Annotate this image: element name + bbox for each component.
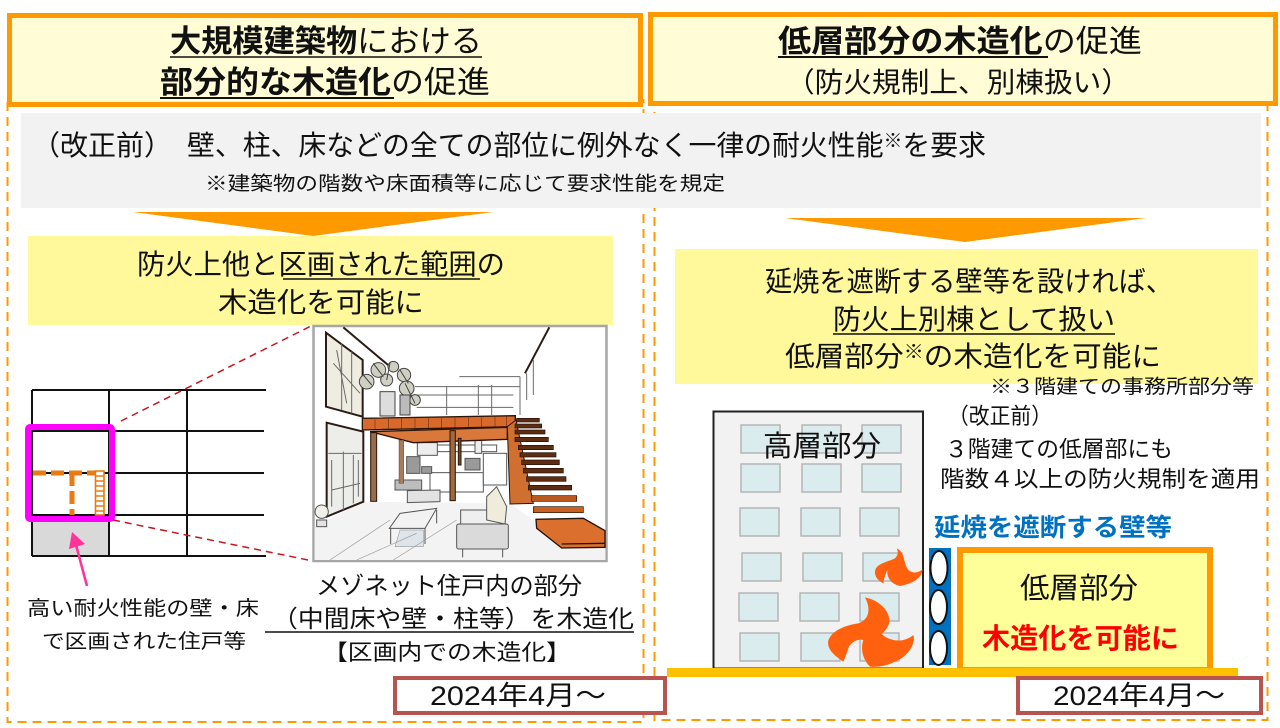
heading: left title <box>10 16 640 104</box>
text: before-revision note right: （改正前） <box>948 404 1052 429</box>
heading: right title: 低層部分の木造化 の促進 <box>778 24 1142 59</box>
sub-element: orange stair ladder <box>96 471 104 515</box>
callout: right yellow conclusion: 延焼を遮断する壁等を設ければ、 <box>765 266 1173 297</box>
panel: left dashed section <box>8 100 644 722</box>
sub-element: magenta highlighted unit <box>28 427 112 519</box>
sub-element: stair treads <box>515 418 583 513</box>
sub-element: sofa and table <box>315 487 508 560</box>
sub-element: windows <box>739 425 902 661</box>
arrow: left down arrow <box>133 212 493 236</box>
icon: small flame <box>875 548 923 586</box>
sub-element: orange mezzanine floor <box>362 416 515 443</box>
sub-element: plants on upper floor <box>359 361 420 416</box>
sub-element: kitchen <box>395 437 507 492</box>
text: maisonette caption: メゾネット住戸内の部分 <box>316 573 582 600</box>
text: before-revision tag: （改正前） <box>32 130 172 161</box>
chart: floor plan grid <box>28 390 266 556</box>
label: right date badge <box>1018 678 1261 713</box>
icon: large flame <box>828 597 914 667</box>
text: before-revision requirement: ※ <box>883 131 902 152</box>
text: partition label <box>27 597 259 653</box>
label: left date badge: 2024年4月～ <box>430 681 606 711</box>
callout: right yellow conclusion: の木造化を可能に <box>924 341 1161 372</box>
heading: right title: （防火規制上、別棟扱い） <box>786 67 1130 98</box>
sub-element: red dashed zoom lines <box>113 325 313 561</box>
text: partition label: で区画された住戸等 <box>42 630 246 653</box>
illustration: high-rise building <box>714 412 923 668</box>
heading: right title <box>650 14 1276 104</box>
sub-element: low-rise label: 低層部分 <box>1020 572 1138 605</box>
sub-element: orange dashed wood partitions <box>33 473 104 515</box>
callout: right yellow conclusion: ※ <box>904 342 924 363</box>
panel: right dashed section <box>654 100 1268 720</box>
panel: before-revision grey band <box>21 113 1261 208</box>
label: fire wall caption: 延焼を遮断する壁等 <box>934 514 1172 542</box>
callout: left yellow conclusion <box>28 236 613 325</box>
sub-element: columns <box>371 431 461 501</box>
sub-element: blue fire wall <box>929 548 951 665</box>
sub-element: red wooden label: 木造化を可能に <box>982 623 1179 654</box>
text: maisonette caption: 【区画内での木造化】 <box>323 640 571 665</box>
text: before-revision footnote: ※建築物の階数や床面積等に応じて要求性能を規定 <box>205 173 725 195</box>
sub-element: stair landing <box>536 518 605 548</box>
callout: right yellow conclusion: 低層部分 <box>785 341 897 372</box>
text: partition label: 高い耐火性能の壁・床 <box>27 597 259 620</box>
sub-element: walls and windows <box>326 327 549 517</box>
sub-element: high-rise label: 高層部分 <box>763 430 881 463</box>
sub-element: orange stair support wall <box>507 420 533 504</box>
text: before-revision requirement: を要求 <box>902 130 986 161</box>
illustration: low-rise wooden section <box>960 550 1210 670</box>
illustration: maisonette interior <box>314 326 606 561</box>
callout: right yellow conclusion <box>675 249 1258 384</box>
label: right date badge: 2024年4月～ <box>1053 681 1225 711</box>
text: maisonette caption: （中間床や壁・柱等）を木造化 <box>272 606 634 633</box>
text: before-revision note right: 階数４以上の防火規制を適用 <box>940 467 1260 492</box>
callout: right yellow conclusion: 防火上別棟として扱い <box>833 304 1115 335</box>
sub-element: ground line <box>667 668 1238 677</box>
arrow: right down arrow <box>785 218 1146 242</box>
sub-element: floor <box>315 502 605 560</box>
text: maisonette caption <box>265 573 634 665</box>
heading: left title: 部分的な木造化 の促進 <box>160 65 490 100</box>
callout: left yellow conclusion: 防火上他と区画された範囲の <box>137 249 505 280</box>
text: before-revision requirement: 壁、柱、床などの全ての部位に例外なく一律の耐火性能 <box>187 130 887 161</box>
label: left date badge <box>395 678 665 713</box>
arrow: pink arrow to partition <box>69 532 87 586</box>
text: before-revision note right: ３階建ての低層部にも <box>945 437 1173 462</box>
heading: left title: 大規模建築物における <box>170 24 482 59</box>
text: right footnote: ※３階建ての事務所部分等 <box>990 376 1254 398</box>
text: before-revision note right <box>940 404 1260 492</box>
callout: left yellow conclusion: 木造化を可能に <box>218 287 424 318</box>
